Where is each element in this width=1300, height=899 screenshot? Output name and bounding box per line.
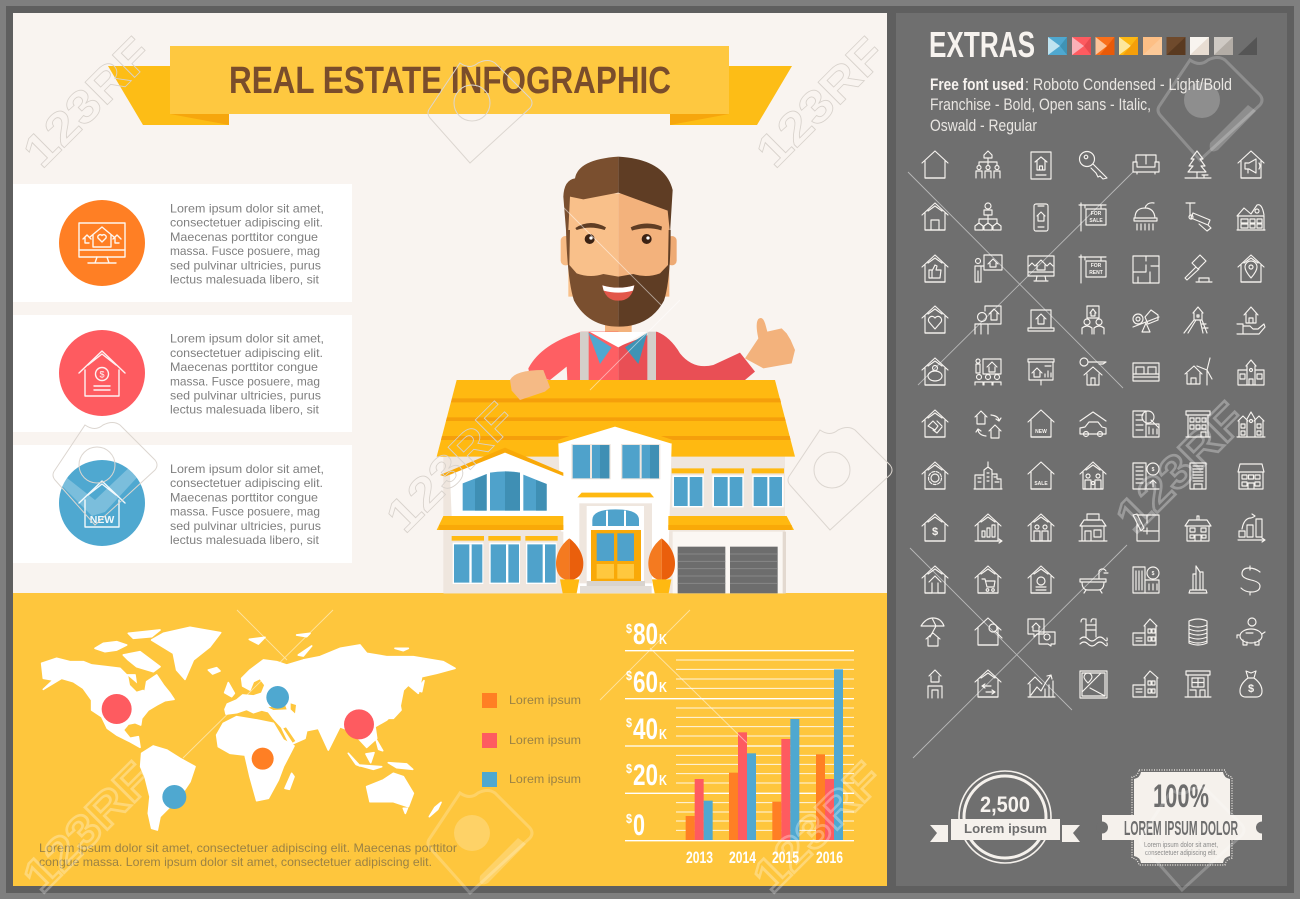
- icon: money bag: [1240, 671, 1262, 697]
- icon: building dollar: $: [1152, 571, 1155, 577]
- icon: key: [1080, 152, 1107, 179]
- stamps on yellow and dark panels: [428, 58, 1262, 893]
- text block 2: [170, 332, 324, 417]
- 123RF marks: 123RF: [745, 27, 895, 177]
- extras heading: EXTRAS: [929, 24, 1035, 65]
- icon: for sale sign: FOR: [1091, 211, 1102, 217]
- icon: person with house: [928, 670, 942, 698]
- legend: [482, 693, 581, 787]
- icon: for sale sign: SALE: [1089, 218, 1103, 224]
- map marker: China: [344, 709, 374, 739]
- badge percent: 100%: [1153, 778, 1209, 814]
- badge: 2,500: [930, 771, 1080, 863]
- text block 1: sed pulvinar ultricies, purus: [170, 258, 321, 272]
- icon: for rent sign: FOR: [1091, 263, 1102, 269]
- 123RF marks: 123RF: [12, 27, 162, 177]
- y axis labels: K: [659, 772, 667, 789]
- panel: main cream background: [13, 13, 887, 593]
- icon: playground: [1184, 307, 1208, 333]
- icon: garage house: [1133, 671, 1158, 697]
- y axis labels: $: [626, 715, 633, 730]
- icon: house map pin: [1238, 255, 1264, 282]
- icon: house with dollar: $: [99, 370, 105, 380]
- text block 3: lectus malesuada libero, sit: [170, 533, 320, 547]
- y axis labels: 40: [633, 713, 658, 746]
- icon: bar growth: [1238, 514, 1265, 542]
- icon: house with dollar: [79, 351, 125, 396]
- bars 2014: [729, 732, 756, 840]
- y axis labels: 0: [633, 809, 645, 842]
- world map: [42, 627, 455, 830]
- icon: presenter: [975, 255, 1002, 282]
- y axis labels: $: [626, 761, 633, 776]
- font credits: : Roboto Condensed - Light/Bold: [1025, 75, 1232, 94]
- x axis labels: 2014: [729, 848, 756, 867]
- font credits: Franchise - Bold, Open sans - Italic,: [930, 95, 1151, 114]
- icon: cctv: [1186, 203, 1211, 231]
- icon: two storey house: [1185, 516, 1211, 541]
- icon: tablet house: [1031, 152, 1051, 179]
- icon: tower: [1190, 463, 1206, 489]
- icon: manor: [1237, 412, 1265, 437]
- map caption: [39, 841, 457, 869]
- text block 2: Lorem ipsum dolor sit amet,: [170, 332, 324, 346]
- legend: Lorem ipsum: [509, 733, 581, 747]
- icon: swimming pool: [1080, 619, 1107, 646]
- text block 3: Maecenas porttitor congue: [170, 490, 318, 504]
- bars 2015: [772, 719, 799, 840]
- icon: projector screen: [1028, 359, 1054, 385]
- icon: house dollar: $: [932, 526, 938, 538]
- x axis labels: 2016: [816, 848, 843, 867]
- x axis labels: 2013: [686, 848, 713, 867]
- icon: listing bubbles: [1028, 619, 1055, 646]
- map marker: Africa: [252, 748, 274, 770]
- 123RF marks: 123RF: [12, 752, 162, 899]
- icon: house heart: [922, 306, 948, 333]
- icon: building value: [1133, 463, 1159, 489]
- icon: for rent sign: [1079, 255, 1106, 283]
- illustration: house and agent: [437, 157, 795, 593]
- icon: house thumbs up: [922, 255, 948, 282]
- icon: apartment building: [1186, 411, 1210, 437]
- text block 1: [170, 202, 324, 286]
- map marker: USA: [102, 694, 132, 724]
- panel: info card 3: [13, 445, 352, 563]
- icon: laptop house: [1028, 310, 1054, 331]
- continents: [42, 627, 455, 830]
- icon: monitor with houses: [79, 223, 125, 263]
- colour swatches: [1048, 37, 1257, 55]
- y axis labels: K: [659, 726, 667, 743]
- icon: house dollar: [922, 514, 948, 541]
- house: [437, 380, 795, 593]
- stamp overlay on blue circle: [60, 462, 144, 516]
- bars 2013: [686, 779, 713, 840]
- text block 2: consectetuer adipiscing elit.: [170, 346, 323, 360]
- y axis labels: $: [626, 668, 633, 683]
- icon: insured house: [921, 618, 944, 646]
- icon: key and house: [1080, 358, 1106, 385]
- icon: skyscraper: [1189, 566, 1207, 593]
- icon: building dollar: [1133, 567, 1159, 593]
- badge small text: Lorem ipsum dolor sit amet,: [1144, 842, 1218, 849]
- icon: large house: [1238, 464, 1264, 489]
- 123RF marks: 123RF: [1105, 392, 1255, 542]
- icon: house search: [975, 618, 1002, 645]
- icon: house exchange: [975, 411, 1001, 438]
- y axis labels: 80: [633, 618, 658, 651]
- badge small text: [1144, 842, 1218, 857]
- icon: building value: $: [1152, 467, 1155, 473]
- y axis labels: K: [659, 679, 667, 696]
- y axis labels: 20: [633, 759, 658, 792]
- man's hand on roof: [510, 370, 550, 400]
- icon: round tower: [1189, 619, 1207, 645]
- icon: house and garage: [1133, 619, 1157, 645]
- icon: gavel: [1185, 255, 1212, 282]
- icon: house handshake: [922, 410, 948, 437]
- icon: new house: NEW: [90, 514, 114, 526]
- text block 2: Maecenas porttitor congue: [170, 360, 318, 374]
- icon: monitor houses: [1028, 256, 1054, 281]
- map marker: Europe: [266, 686, 289, 709]
- icon: agent with house board: [975, 306, 1001, 334]
- map marker: South America: [162, 785, 186, 809]
- text block 3: sed pulvinar ultricies, purus: [170, 519, 321, 533]
- icon: school building: [1238, 360, 1264, 385]
- icon: windmill house: [1185, 358, 1212, 385]
- icon: couple house: [1028, 514, 1054, 541]
- icon: plan with pencil: [1133, 514, 1159, 541]
- font credits: Free font used: [930, 75, 1024, 94]
- text block 1: lectus malesuada libero, sit: [170, 272, 320, 286]
- icon: sale house: SALE: [1034, 481, 1048, 487]
- bars 2016: [816, 669, 843, 840]
- text block 2: lectus malesuada libero, sit: [170, 403, 320, 417]
- icon: family house: [1080, 462, 1106, 489]
- icon: team organisation: [976, 151, 1000, 178]
- badge small text: consectetuer adipiscing elit.: [1145, 850, 1217, 857]
- text block 1: massa. Fusce posuere, mag: [170, 244, 320, 258]
- icon: new house: [79, 481, 125, 527]
- y axis labels: [626, 618, 667, 842]
- 123RF marks: 123RF: [742, 752, 892, 899]
- title: REAL ESTATE INFOGRAPHIC: [229, 60, 671, 102]
- 123RF marks: 123RF: [375, 392, 525, 542]
- panel: info card 2: [13, 315, 352, 432]
- text block 1: Maecenas porttitor congue: [170, 230, 318, 244]
- icon: tree: [1185, 151, 1211, 178]
- icon: phone house: [1034, 204, 1048, 231]
- icon: house certificate: [1028, 566, 1054, 593]
- icon: house rising chart: [1028, 675, 1055, 697]
- inland seas: [128, 676, 296, 743]
- icon: shower: [1134, 203, 1157, 230]
- icon: exchange house: [975, 670, 1001, 697]
- y axis labels: $: [626, 811, 633, 826]
- icon: for rent sign: RENT: [1089, 270, 1103, 276]
- man: [528, 157, 795, 380]
- legend: Lorem ipsum: [509, 772, 581, 786]
- icon: car port: [1080, 412, 1106, 436]
- icon: house megaphone: [1238, 151, 1264, 178]
- icon: new house: [1028, 410, 1054, 437]
- icon: map: [1080, 671, 1107, 698]
- icon: sale house: [1028, 462, 1054, 489]
- text block 1: Lorem ipsum dolor sit amet,: [170, 202, 324, 216]
- badge: 100%: [1096, 770, 1268, 865]
- panel: extras dark sidebar: [896, 13, 1287, 886]
- map caption: Lorem ipsum dolor sit amet, consectetuer adipiscing elit. Maecenas porttitor: [39, 841, 457, 855]
- bar chart: [625, 618, 854, 867]
- panel: yellow lower section: [13, 593, 887, 886]
- icon: city: [974, 462, 1002, 489]
- icon: balance: [1133, 310, 1159, 332]
- text block 3: consectetuer adipiscing elit.: [170, 476, 323, 490]
- icon: couple with board: [1082, 306, 1104, 334]
- text block 1: consectetuer adipiscing elit.: [170, 216, 323, 230]
- icon: apartment: [1185, 671, 1211, 697]
- text block 3: [170, 462, 324, 547]
- icon: house piggy: [922, 358, 948, 385]
- icon: piggy bank: [1237, 618, 1265, 645]
- y axis labels: $: [626, 621, 633, 636]
- font credits: [930, 75, 1232, 135]
- icon: dollar sign: [1241, 566, 1260, 595]
- text block 3: Lorem ipsum dolor sit amet,: [170, 462, 324, 476]
- panel: info card 1: [13, 184, 352, 302]
- icon: double house: [922, 566, 948, 593]
- icon: shopping house: [975, 566, 1001, 593]
- icon: house with door: [922, 203, 948, 230]
- badge label: Lorem ipsum: [964, 821, 1047, 836]
- icon: floor plan: [1133, 256, 1159, 283]
- legend: Lorem ipsum: [509, 693, 581, 707]
- badge number: 2,500: [980, 792, 1030, 817]
- icon: for sale sign: [1079, 203, 1106, 231]
- stamps on cream: [53, 60, 892, 530]
- y axis labels: K: [659, 631, 667, 648]
- icon: hand holding house: [1237, 307, 1265, 334]
- icon: store: [1079, 514, 1107, 541]
- icon: presentation to group: [975, 359, 1001, 385]
- title banner: [108, 46, 792, 125]
- icon: money bag: $: [1248, 683, 1254, 695]
- icon: sofa: [1133, 155, 1159, 174]
- icon: new house: NEW: [1035, 429, 1047, 435]
- icon: mansion: [1237, 205, 1265, 230]
- icon: org chart: [975, 203, 1001, 230]
- text block 2: sed pulvinar ultricies, purus: [170, 388, 321, 402]
- icon: house chart: [975, 514, 1002, 543]
- map caption: congue massa. Lorem ipsum dolor sit amet, consectetuer adipiscing elit.: [39, 855, 432, 869]
- icon: bathtub: [1080, 569, 1108, 593]
- x axis labels: 2015: [772, 848, 799, 867]
- text block 3: massa. Fusce posuere, mag: [170, 505, 320, 519]
- icon: bed: [1133, 363, 1159, 381]
- icon grid: [921, 151, 1265, 698]
- icon: building search: [1133, 411, 1159, 437]
- text block 2: massa. Fusce posuere, mag: [170, 374, 320, 388]
- icon: house: [922, 151, 948, 178]
- icon: house gear dollar: [922, 462, 948, 489]
- y axis labels: 60: [633, 666, 658, 699]
- font credits: Oswald - Regular: [930, 116, 1037, 135]
- x axis labels: [686, 848, 843, 867]
